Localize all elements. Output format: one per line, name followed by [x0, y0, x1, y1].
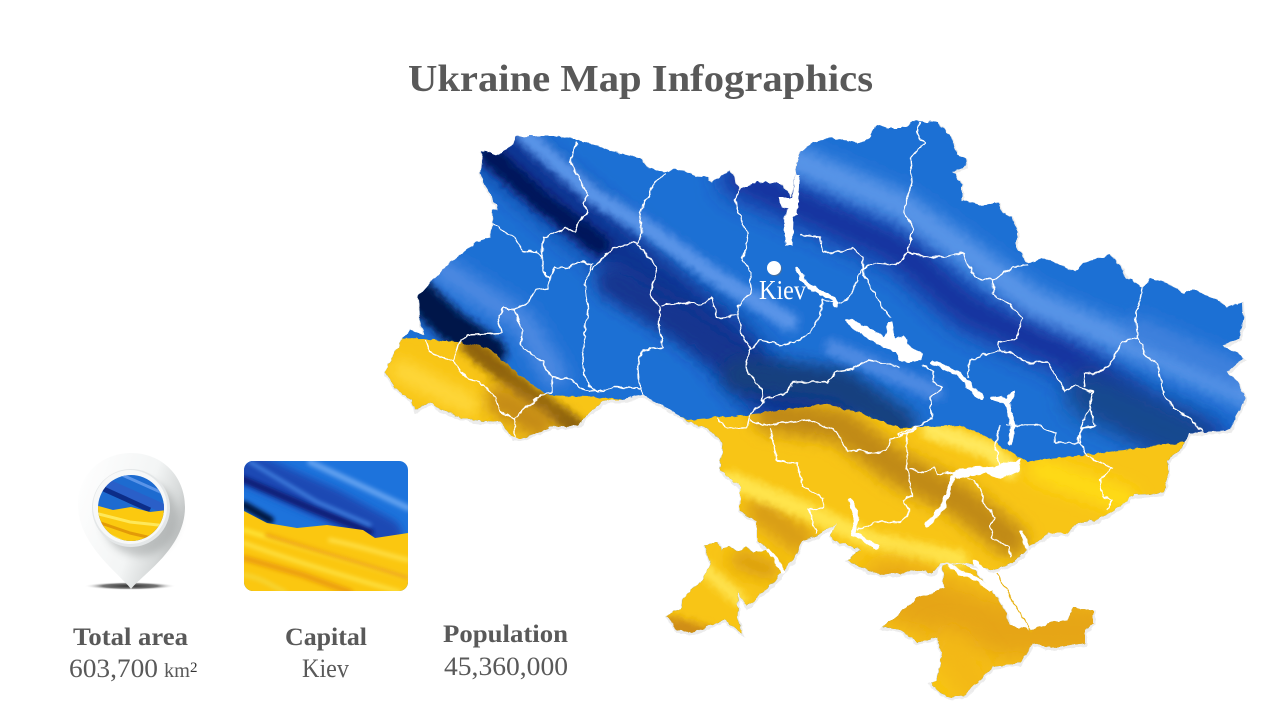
Arabat spit	[997, 573, 1032, 632]
capital marker: Kiev: Kiev	[759, 275, 806, 305]
inner flag	[98, 475, 164, 541]
stat: population: 45,360,000	[444, 652, 568, 681]
stat: total area: 603,700	[69, 654, 158, 683]
stat: capital: Capital	[285, 624, 367, 651]
flag image	[240, 461, 408, 592]
stat: total area: km	[164, 660, 190, 682]
stat: total area: 2	[190, 660, 198, 676]
oblast borders	[425, 122, 1203, 557]
map artwork	[370, 110, 1260, 710]
yellow lower part of map	[384, 338, 1185, 698]
title: Ukraine Map Infographics	[408, 58, 873, 100]
ring shadow	[102, 480, 178, 556]
stat: capital	[285, 624, 367, 683]
map of Ukraine	[370, 110, 1260, 710]
rivers and lakes	[767, 175, 1027, 592]
pin shadow	[84, 582, 176, 590]
map outline glow	[386, 122, 1246, 698]
stat: total area: Total area	[73, 624, 189, 651]
inner ring	[92, 469, 170, 547]
stat: capital: Kiev	[302, 654, 349, 683]
stat: total area	[69, 624, 198, 683]
capital marker: Kiev	[759, 261, 806, 305]
map flag fill	[370, 110, 1260, 710]
icon: location pin with flag	[88, 454, 185, 590]
pin body	[78, 453, 185, 589]
stat: population: Population	[443, 621, 568, 648]
stat: population	[443, 621, 568, 681]
